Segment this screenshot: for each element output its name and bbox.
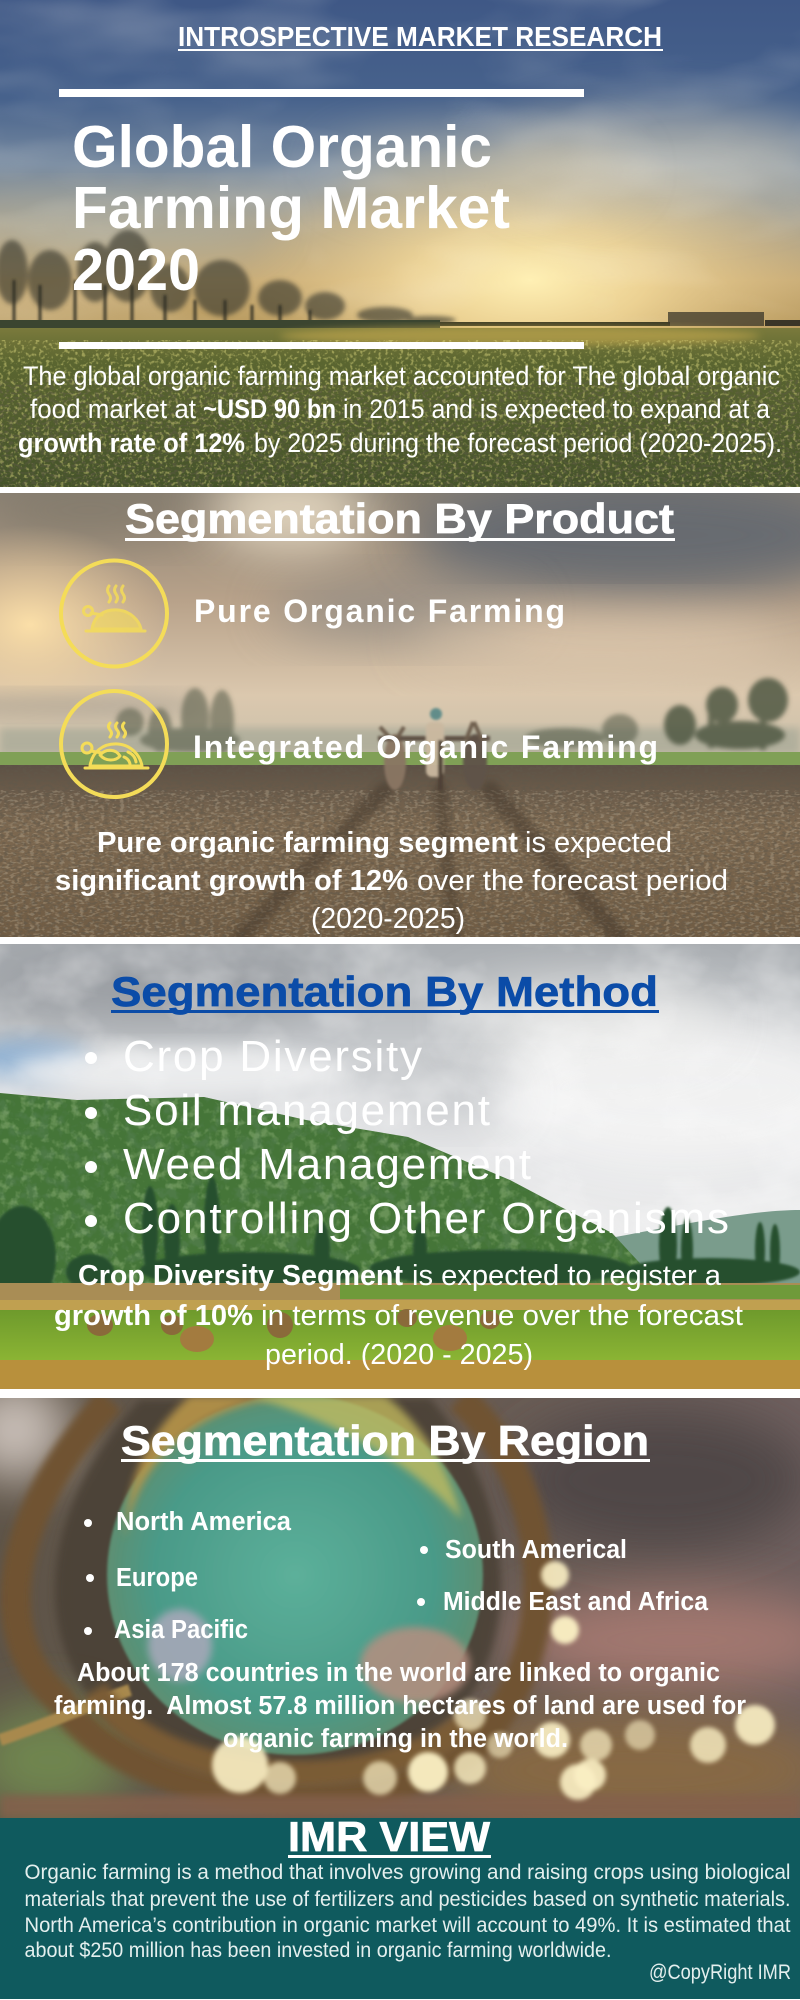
far hills (616, 1210, 800, 1283)
publisher heading: INTROSPECTIVE MARKET RESEARCH (178, 21, 662, 52)
label: integrated organic farming: Integrated Organic Farming (193, 729, 658, 765)
magnifier ring (16, 1398, 538, 1799)
panel: market overview (0, 0, 800, 487)
region list: left column: Europe (116, 1564, 198, 1592)
top rule (59, 89, 584, 97)
trees (0, 1176, 800, 1283)
method text: in terms of revenue over the forecast (261, 1300, 743, 1332)
hay bales (87, 1309, 500, 1352)
icon: roast chicken in circle (61, 691, 167, 797)
heading: IMR VIEW (288, 1813, 490, 1860)
overview text: by 2025 during the forecast period (2020-2025). (254, 428, 782, 458)
furrows (240, 790, 620, 937)
region text: organic farming in the world. (223, 1725, 568, 1753)
overview text: in 2015 and is expected to expand at a (343, 394, 770, 424)
method text: Crop Diversity Segment (78, 1260, 403, 1292)
region list: right column (417, 1536, 709, 1616)
product text: Pure organic farming segment (97, 827, 518, 859)
overview text: ~USD 90 bn (203, 394, 336, 424)
product text (55, 827, 728, 935)
teal band (0, 1818, 800, 1999)
heading: Segmentation By Product (125, 495, 674, 542)
icon: roast chicken in circle (61, 560, 167, 666)
IMR view text: about $250 million has been invested in organic farming worldwide. (24, 1938, 612, 1962)
heading: Segmentation By Method (111, 968, 658, 1015)
method bullet list: Crop Diversity (123, 1032, 422, 1081)
method text: is expected to register a (412, 1260, 722, 1292)
background photo: ploughed field (0, 470, 800, 937)
panel: segmentation by product (0, 470, 800, 937)
title (72, 114, 510, 303)
title: Global Organic (72, 114, 492, 180)
bottom rule (59, 342, 584, 349)
brass stand (0, 1690, 130, 1740)
overview text: growth rate of 12% (18, 428, 245, 458)
region text (54, 1659, 746, 1753)
heading: Segmentation By Region (121, 1417, 649, 1464)
region list: right column: South Americal (445, 1536, 627, 1564)
panel: segmentation by method (0, 944, 800, 1389)
method bullet list: Controlling Other Organisms (123, 1194, 729, 1243)
overview text (18, 361, 782, 458)
panel: segmentation by region (0, 1380, 800, 1830)
panel: IMR view (0, 1813, 800, 1999)
background photo: globe behind magnifier (0, 1380, 800, 1830)
method text (54, 1260, 743, 1371)
region text: About 178 countries in the world are linked to organic (77, 1659, 720, 1687)
distant tree lines (0, 230, 800, 332)
globe (107, 1395, 483, 1755)
product text: over the forecast period (417, 865, 728, 897)
farmer and oxen (378, 708, 490, 790)
method text: period. (2020 - 2025) (265, 1339, 533, 1371)
IMR view text (24, 1860, 791, 1962)
region list: left column (84, 1508, 292, 1644)
method text: growth of 10% (54, 1300, 253, 1332)
title: 2020 (72, 237, 200, 303)
background photo: green hill and hay field (0, 944, 800, 1389)
product text: is expected (525, 827, 672, 859)
overview text: food market at (30, 394, 197, 424)
region list: left column: North America (116, 1508, 292, 1536)
overview text: The global organic farming market accounted for The global organic (23, 361, 780, 391)
product text: significant growth of 12% (55, 865, 408, 897)
background photo: sunset over field (0, 0, 800, 487)
bokeh lights (212, 1561, 775, 1800)
method bullet list (85, 1032, 729, 1243)
label: pure organic farming: Pure Organic Farming (194, 593, 565, 629)
distant trees (116, 678, 788, 754)
region text: farming. Almost 57.8 million hectares of land are used for (54, 1692, 746, 1720)
product text: (2020-2025) (311, 903, 465, 935)
region list: right column: Middle East and Africa (443, 1588, 709, 1616)
main hill (0, 1093, 660, 1285)
lower rim (95, 1690, 470, 1773)
title: Farming Market (72, 175, 510, 241)
method bullet list: Weed Management (123, 1140, 531, 1189)
method bullet list: Soil management (123, 1086, 490, 1135)
region list: left column: Asia Pacific (114, 1616, 248, 1644)
